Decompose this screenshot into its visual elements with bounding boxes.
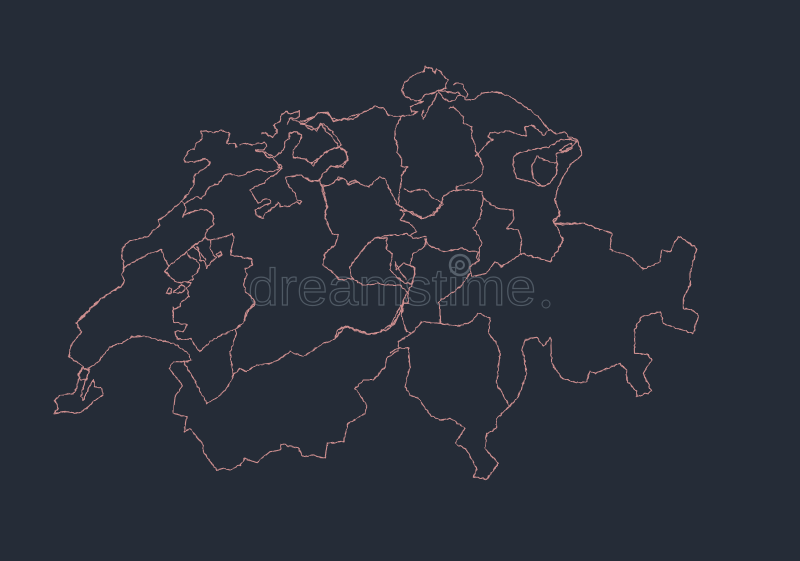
western cantons: Jura, Neuchatel, Vaud, Fribourg bbox=[79, 130, 280, 320]
southwest: Geneva, Lake Geneva shore, Valais bbox=[54, 300, 403, 470]
northern cantons: Aargau, Zurich, Schaffhausen, Thurgau, St. Gallen, Appenzell bbox=[300, 67, 600, 260]
southeast: Ticino and Graubunden bbox=[390, 210, 698, 479]
watermark: dreamstime bbox=[248, 259, 536, 317]
central cantons: Lucerne, Obwalden, Nidwalden, Uri bbox=[323, 203, 443, 340]
map of Switzerland with canton borders bbox=[54, 67, 698, 479]
Basel and Solothurn bbox=[240, 111, 360, 220]
